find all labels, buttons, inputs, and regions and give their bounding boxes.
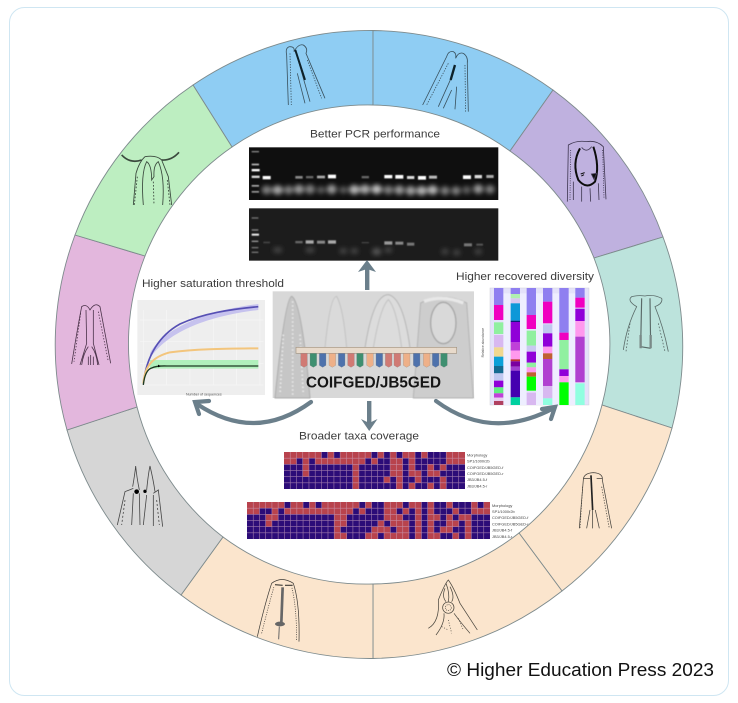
legend: heatmap bottom row labels: COIFGED/JB5GED-f <box>492 515 529 520</box>
icon: nematode head, purple <box>567 141 606 202</box>
icon: nematode head, gray <box>117 466 163 527</box>
icon: nematode head, peach right <box>579 473 612 528</box>
legend: heatmap bottom row labels <box>492 503 529 539</box>
panel: nematode photo with primer banner <box>273 291 474 398</box>
ring segment: purple <box>510 90 663 258</box>
bar 6 <box>575 288 585 405</box>
ring segment: green <box>75 85 232 256</box>
icon: nematode head, peach bottom left <box>257 579 299 642</box>
ring segment: teal <box>594 237 683 428</box>
legend: heatmap bottom row labels: Morphology <box>492 503 512 508</box>
legend: heatmap top row labels: JB3/JB4.5-f <box>467 477 488 482</box>
copyright note: © Higher Education Press 2023 <box>447 660 714 680</box>
ring segment: blue right <box>373 30 553 151</box>
heading: broader taxa coverage: Broader taxa coverage <box>299 430 419 442</box>
chart: PCR gel bottom <box>249 208 498 261</box>
bar 1 <box>494 288 503 405</box>
legend: heatmap bottom row labels: COIFGED/JB5GED-r <box>492 521 529 526</box>
legend: heatmap top row labels: Morphology <box>467 452 487 458</box>
panel: segmented ring <box>55 30 683 659</box>
chart: stacked composition bars: Relative abundance <box>481 328 485 357</box>
legend: heatmap top row labels <box>467 452 504 488</box>
arrow: curved to saturation chart <box>195 401 311 423</box>
heading: higher saturation threshold: Higher saturation threshold <box>142 278 284 290</box>
chart: rarefaction curves: Number of sequences <box>186 392 222 396</box>
heading: better PCR performance: Better PCR performance <box>310 128 440 140</box>
icon: nematode head, blue left <box>286 45 325 105</box>
ring segment: gray <box>67 407 223 595</box>
arrow: curved to diversity chart <box>436 401 555 423</box>
bar 2 <box>511 288 520 405</box>
legend: heatmap bottom row labels: SP1/1000r2b <box>492 509 515 514</box>
icon: nematode head, teal <box>623 295 668 352</box>
legend: heatmap bottom row labels: JB3/JB4.5-f <box>492 528 513 533</box>
chart: heatmap bottom <box>247 502 490 539</box>
arrow: down to taxa coverage <box>361 401 378 431</box>
ring segment: blue left <box>193 30 373 147</box>
ring segment: peach bottom right <box>373 533 562 658</box>
icon: nematode head, blue right <box>423 52 468 112</box>
icon: nematode head, green <box>122 152 179 205</box>
ring segment: peach right <box>519 405 672 591</box>
bar 3 <box>527 288 536 405</box>
ring segment: pink <box>55 235 145 430</box>
icon: nematode head, peach bottom right <box>428 580 477 635</box>
legend: heatmap bottom row labels: JB3/JB4.5-r <box>492 534 513 539</box>
legend: heatmap top row labels: COIFGED/JB5GED-f <box>467 465 504 470</box>
legend: heatmap top row labels: SP1/1000r2b <box>467 459 490 464</box>
title: primer name: COIFGED/JB5GED <box>306 374 441 392</box>
arrow: up to PCR gels <box>358 260 376 290</box>
legend: heatmap top row labels: COIFGED/JB5GED-r <box>467 471 504 476</box>
legend: heatmap top row labels: JB3/JB4.5-r <box>467 483 488 488</box>
chart: heatmap top <box>284 452 465 489</box>
chart: stacked composition bars <box>481 288 589 405</box>
ring segment: peach bottom left <box>181 537 373 659</box>
bar 5 <box>559 288 569 405</box>
icon: nematode head, pink <box>72 305 111 365</box>
banner flags <box>301 353 447 367</box>
heading: higher recovered diversity: Higher recovered diversity <box>456 271 594 283</box>
bar 4 <box>543 288 552 405</box>
chart: PCR gel top <box>249 147 498 200</box>
chart: rarefaction curves <box>137 300 265 396</box>
